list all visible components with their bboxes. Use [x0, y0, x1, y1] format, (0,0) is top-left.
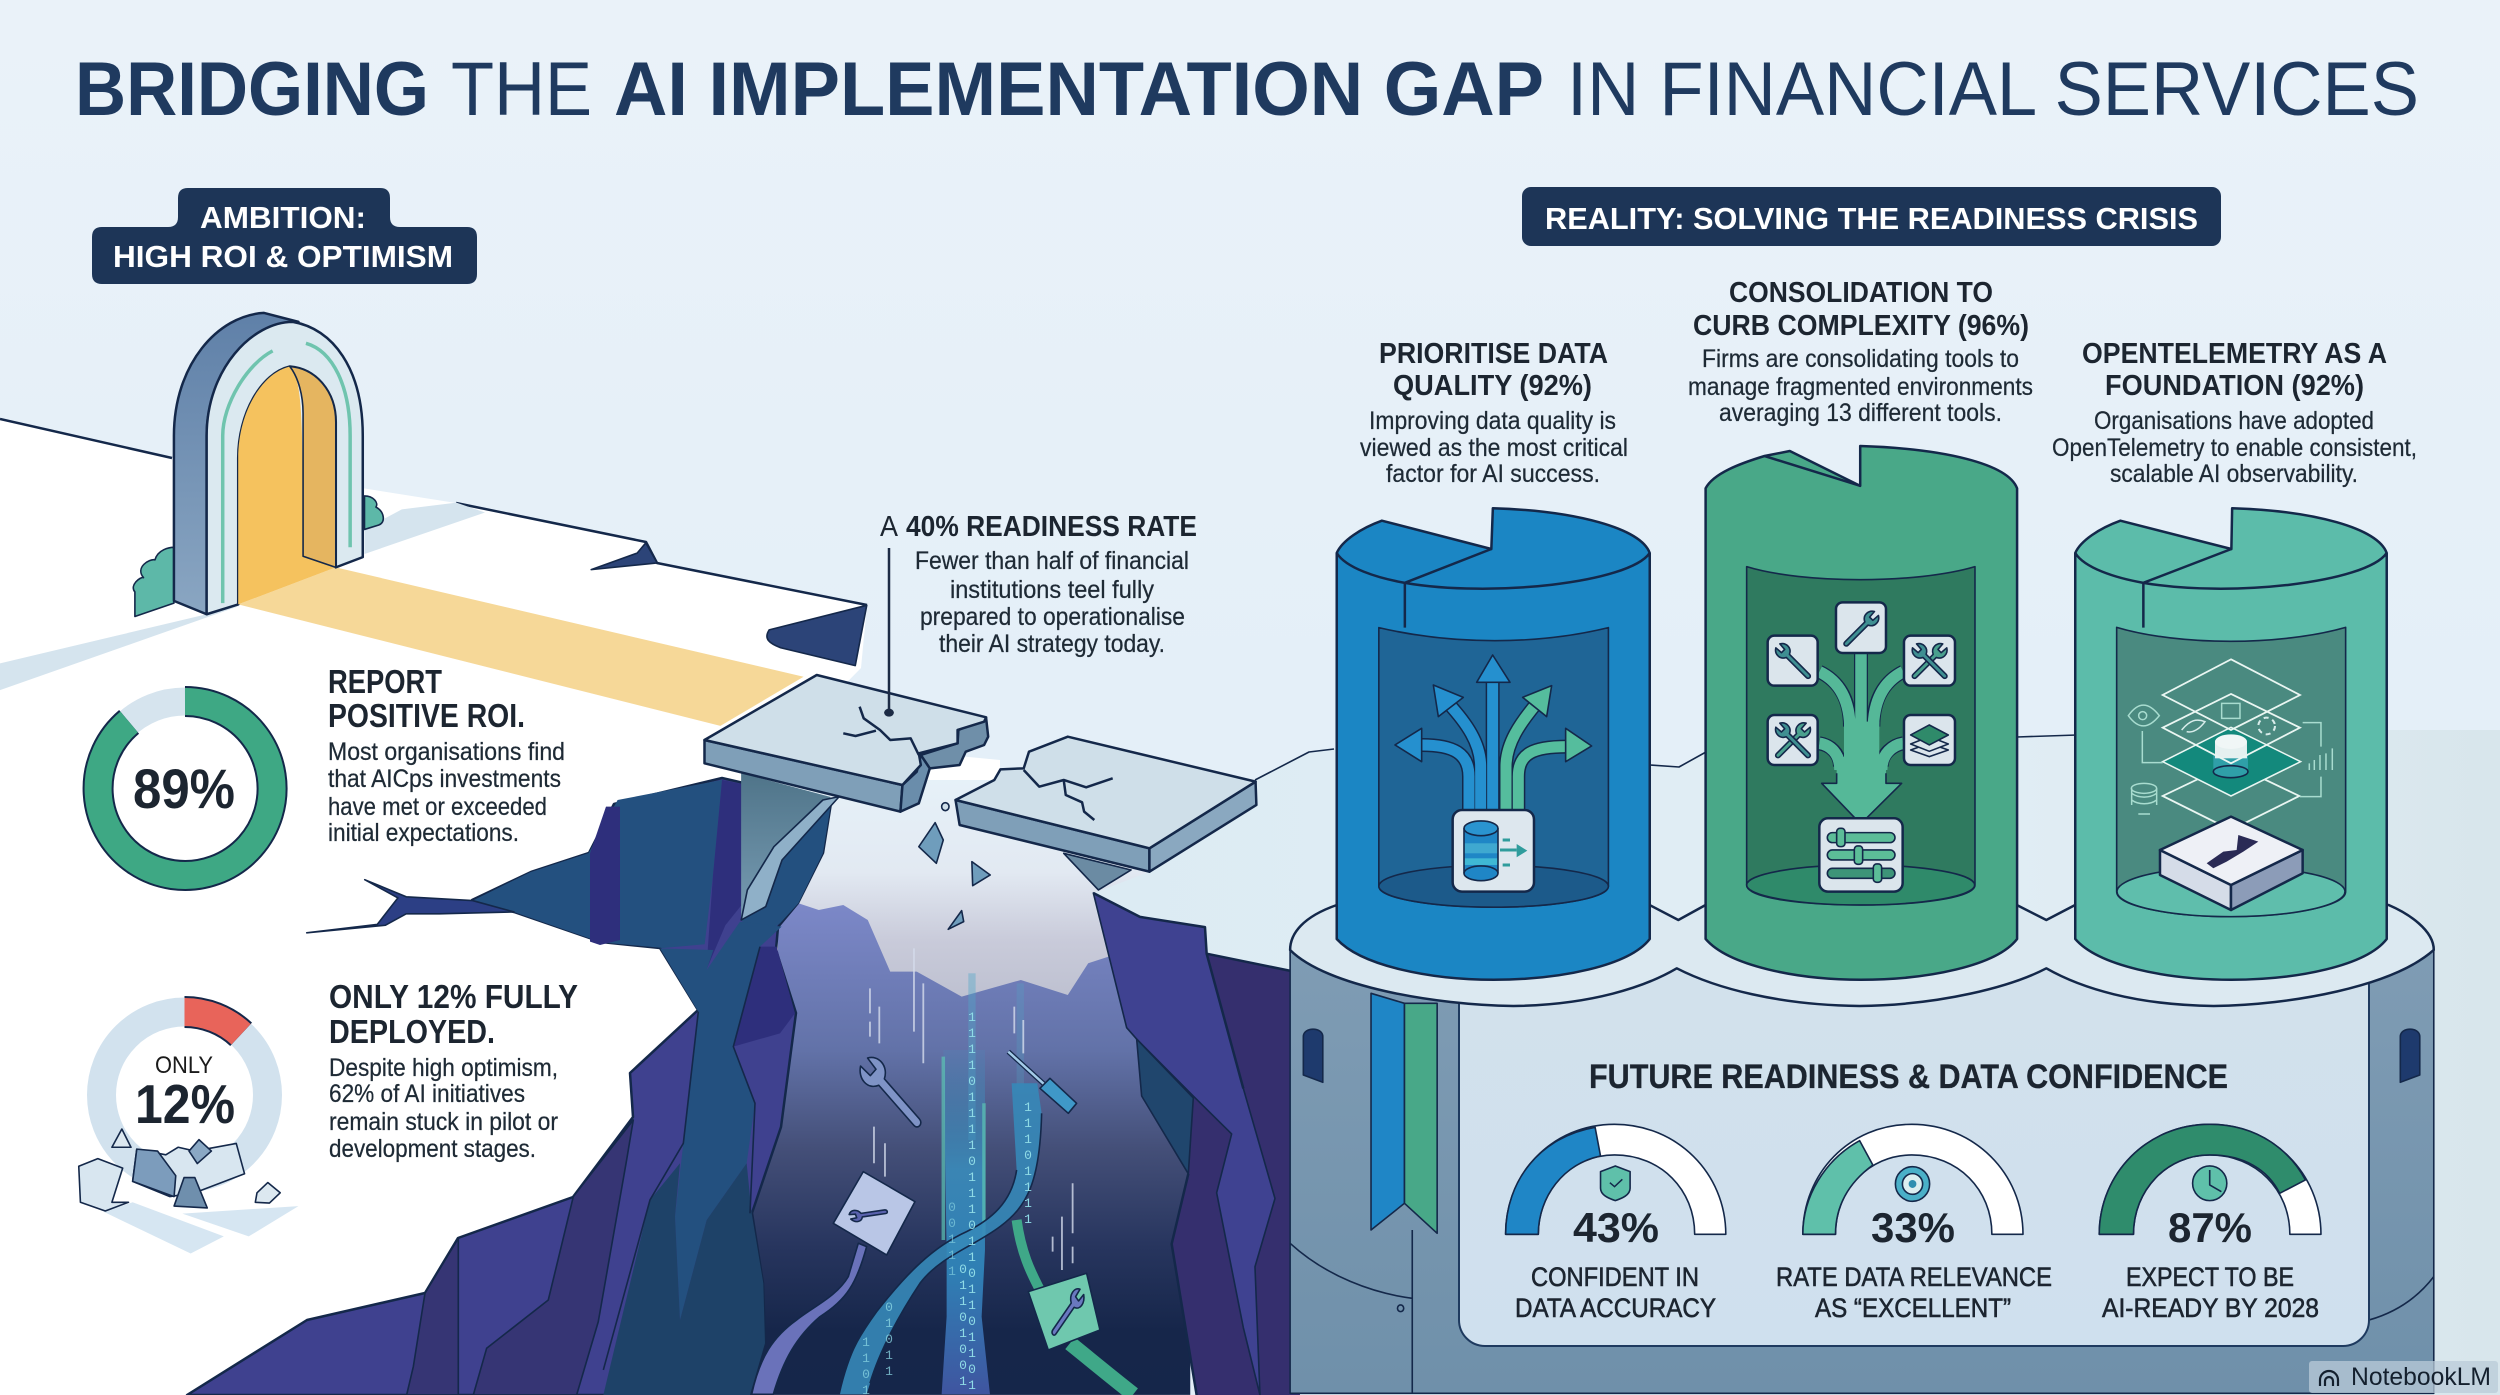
- pedestal top plate: [1290, 905, 2434, 1006]
- data stream: [752, 948, 1133, 1394]
- gauge: 33%: AS “EXCELLENT”: [1815, 1293, 2011, 1323]
- cylinder rim: [1337, 549, 1650, 628]
- illustration: gateway arch and light beam: [0, 313, 867, 726]
- icon: sliders card: [1819, 818, 1903, 892]
- navy base: [603, 1163, 765, 1395]
- gauge: 43%: 43%: [1573, 1204, 1659, 1251]
- faint stem: [968, 973, 976, 1140]
- gauge: 43%: DATA ACCURACY: [1515, 1293, 1716, 1323]
- icon: base block: [2160, 817, 2303, 910]
- upper blue face: [307, 773, 831, 970]
- ground crack: [307, 880, 514, 933]
- far-left stripe: [590, 807, 620, 945]
- falling lines: [870, 948, 1073, 1270]
- right slab top: [956, 737, 1256, 848]
- donut: 12%: [102, 1012, 268, 1178]
- text: only 12% deployed: ONLY 12% FULLY: [329, 978, 578, 1015]
- callout: 40% readiness: 40% READINESS RATE: [906, 511, 1197, 543]
- text: report positive roi: REPORT: [328, 663, 442, 700]
- donut value: [98, 701, 272, 875]
- badge: ambition: HIGH ROI & OPTIMISM: [113, 239, 453, 274]
- title: IN FINANCIAL SERVICES: [1567, 47, 2419, 132]
- title: AI IMPLEMENTATION GAP: [614, 47, 1544, 132]
- text: consolidation: Firms are consolidating tools to: [1702, 345, 2019, 373]
- green ribbon: [1017, 1220, 1040, 1290]
- window floor: [2117, 867, 2345, 917]
- diverging arrows: [1395, 655, 1592, 892]
- gauge: 43%: [1515, 1204, 1716, 1323]
- rubble pieces: [79, 1159, 128, 1211]
- blue column: [660, 922, 782, 1320]
- fragments: [919, 823, 943, 863]
- stream glow edges: [943, 1057, 984, 1240]
- icon: tool tile upper right: [1904, 636, 1955, 686]
- right slab side: [1149, 782, 1256, 872]
- callout: 40% readiness: Fewer than half of financial: [915, 547, 1189, 575]
- badge: ambition: [92, 188, 477, 284]
- callout dot: [884, 709, 894, 717]
- binary digits: 01011: [882, 1300, 896, 1380]
- text: only 12% deployed: remain stuck in pilot or: [329, 1108, 558, 1136]
- text: only 12% deployed: 62% of AI initiatives: [329, 1080, 525, 1108]
- gauges: [1506, 1124, 2321, 1234]
- donut label: 89%: [133, 757, 235, 820]
- pedestal body: [1290, 947, 2434, 1393]
- text: opentelemetry: [2052, 338, 2417, 488]
- callout: 40% readiness: institutions teel fully: [950, 576, 1154, 604]
- dark teal recess: [1137, 1039, 1193, 1174]
- cylinder: data quality: [1337, 508, 1650, 980]
- arch front: [207, 322, 363, 614]
- text: report positive roi: [328, 663, 565, 847]
- text: opentelemetry: OPENTELEMETRY AS A: [2082, 338, 2387, 370]
- callout: 40% readiness: [880, 511, 1197, 658]
- cylinder: opentelemetry: [2075, 508, 2387, 980]
- callout: 40% readiness: their AI strategy today.: [939, 630, 1165, 658]
- text: prioritise data quality: [1360, 338, 1628, 488]
- cylinder body: [2075, 508, 2387, 980]
- dark stripe: [706, 780, 746, 970]
- binary digits: 00111: [944, 1200, 960, 1280]
- icon: notebook arcs: [2320, 1371, 2338, 1386]
- icon: shield: [1601, 1166, 1630, 1201]
- leader line: [888, 548, 890, 713]
- text: prioritise data quality: PRIORITISE DATA: [1379, 338, 1608, 370]
- left slab cracks: [843, 707, 919, 755]
- rock detail beside sliver: [741, 797, 839, 940]
- far-left dark faces: [407, 1120, 633, 1395]
- support under right slab: [1064, 853, 1131, 890]
- gauge: 43%: CONFIDENT IN: [1531, 1262, 1699, 1292]
- title: THE: [451, 47, 592, 132]
- cylinder rim: [1765, 456, 1860, 486]
- lower faces: [590, 807, 795, 1395]
- icon: database card: [1453, 810, 1534, 892]
- window: [1379, 628, 1608, 907]
- text: opentelemetry: scalable AI observability.: [2110, 460, 2358, 488]
- text: consolidation: CONSOLIDATION TO: [1729, 277, 1993, 309]
- text: opentelemetry: FOUNDATION (92%): [2105, 370, 2364, 402]
- left slab front: [704, 740, 902, 812]
- donut track: [102, 1012, 268, 1178]
- text: only 12% deployed: development stages.: [329, 1135, 536, 1163]
- shadow under slab: [741, 773, 831, 920]
- title: BRIDGING: [75, 47, 429, 132]
- arch opening: [238, 367, 336, 604]
- lit face: [1093, 893, 1275, 1395]
- text: report positive roi: Most organisations find: [328, 738, 565, 766]
- gauge: 87%: 87%: [2168, 1204, 2252, 1251]
- gauge tracks: [1506, 1124, 1726, 1234]
- icon: tool tile top: [1836, 602, 1886, 653]
- text: consolidation: [1688, 277, 2033, 427]
- icon: screwdriver: [1008, 1052, 1077, 1113]
- right cliff: [1093, 893, 1300, 1395]
- ground band: [0, 503, 485, 690]
- text: report positive roi: POSITIVE ROI.: [328, 697, 525, 734]
- side icons: [2128, 703, 2332, 814]
- left cliff: [187, 773, 839, 1395]
- blue ribbon: [840, 1083, 1042, 1394]
- icon: core cylinder: [2213, 734, 2248, 778]
- text: prioritise data quality: factor for AI success.: [1386, 460, 1600, 488]
- text: opentelemetry: Organisations have adopted: [2094, 407, 2374, 435]
- donut: 12%: 12%: [135, 1073, 235, 1135]
- light sliver: [741, 797, 839, 920]
- text: report positive roi: have met or exceeded: [328, 793, 547, 821]
- title: [75, 47, 2419, 132]
- arrow heads: [1477, 655, 1510, 682]
- cliff outline: [1093, 893, 1290, 1395]
- gauge: 87%: AI-READY BY 2028: [2102, 1293, 2319, 1323]
- cylinder: consolidation: [1706, 446, 2017, 980]
- icon: green wrench tile: [1028, 1273, 1100, 1350]
- slot right: [2400, 1029, 2420, 1082]
- donut track: [98, 702, 272, 876]
- watermark: notebooklm: [2309, 1361, 2498, 1393]
- text: prioritise data quality: QUALITY (92%): [1393, 370, 1592, 402]
- gauge: 33%: [1776, 1204, 2052, 1323]
- donut labels: ONLY: [155, 1052, 213, 1079]
- stacked layers: [2163, 763, 2299, 830]
- text: only 12% deployed: [329, 978, 578, 1163]
- watermark: notebooklm: NotebookLM: [2351, 1363, 2491, 1391]
- chasm mountains and depth: [745, 903, 1190, 1395]
- cliff mass: [187, 778, 831, 1395]
- gauge: 87%: EXPECT TO BE: [2126, 1262, 2294, 1292]
- icon: light wrench tile: [833, 1172, 915, 1255]
- text: consolidation: averaging 13 different tools.: [1719, 399, 2002, 427]
- badge: reality: [1522, 187, 2221, 246]
- cylinder rim: [2075, 549, 2387, 628]
- arrow trunk: [1822, 722, 1902, 824]
- bushes: [133, 496, 383, 616]
- text: consolidation: CURB COMPLEXITY (96%): [1693, 310, 2029, 342]
- donut: 89%: [98, 701, 272, 876]
- text: report positive roi: initial expectations.: [328, 819, 519, 847]
- stream column: [942, 1050, 990, 1394]
- slot left: [1303, 1029, 1323, 1082]
- right slab cracks: [1024, 770, 1113, 820]
- left slab break: [900, 755, 930, 812]
- gauge fills: [1506, 1127, 1601, 1234]
- converging arrows: [1819, 653, 1903, 767]
- gauge: 33%: RATE DATA RELEVANCE: [1776, 1262, 2052, 1292]
- text: opentelemetry: OpenTelemetry to enable consistent,: [2052, 434, 2417, 462]
- left slab top: [704, 675, 986, 785]
- icon: tool tile upper left: [1768, 636, 1818, 686]
- donut value: [184, 1012, 241, 1034]
- window: [2117, 627, 2346, 917]
- rivet: [1397, 1305, 1404, 1312]
- panel: future readiness: [1459, 960, 2369, 1346]
- callout: 40% readiness: prepared to operationalise: [920, 603, 1185, 631]
- badge: reality: REALITY: SOLVING THE READINESS CRISIS: [1545, 201, 2198, 236]
- gauge: 87%: [2102, 1204, 2319, 1323]
- dark base: [1093, 893, 1300, 1395]
- pedestal seams: [1290, 1230, 2434, 1393]
- window: [1747, 567, 1975, 905]
- binary digits: 11101111: [1020, 1100, 1036, 1228]
- panel heading: FUTURE READINESS & DATA CONFIDENCE: [1589, 1058, 2228, 1096]
- right slab front: [956, 800, 1149, 872]
- callout: 40% readiness: A: [880, 511, 899, 543]
- broken slabs and fragments: [704, 675, 1256, 929]
- gauge: 33%: 33%: [1871, 1204, 1955, 1251]
- icon: layers tile: [1904, 715, 1955, 765]
- icon: clock: [2193, 1166, 2227, 1201]
- icon: tool tile lower left: [1768, 715, 1818, 765]
- dark purple recess: [733, 947, 795, 1047]
- text: only 12% deployed: Despite high optimism,: [329, 1054, 558, 1082]
- rubble shadow: [104, 1202, 298, 1254]
- text: prioritise data quality: Improving data quality is: [1369, 407, 1616, 435]
- badge: ambition: AMBITION:: [200, 200, 366, 235]
- cylinder body: [1706, 446, 2017, 980]
- text: only 12% deployed: DEPLOYED.: [329, 1013, 495, 1050]
- window floor: [1747, 865, 1975, 905]
- arch inlay: [223, 343, 350, 603]
- rubble: [79, 1129, 298, 1254]
- panel background: [1459, 960, 2369, 1346]
- icon: wrench: [860, 1057, 921, 1127]
- binary digits: [858, 1010, 1036, 1395]
- window floor: [1379, 865, 1608, 907]
- icon: target: [1895, 1167, 1930, 1201]
- text: consolidation: manage fragmented environments: [1688, 373, 2033, 401]
- facet lines: [603, 947, 760, 1370]
- arch side: [174, 313, 298, 614]
- binary digits: 01101001: [956, 1262, 970, 1390]
- right ground: [1094, 730, 2500, 1395]
- chasm sky: [745, 780, 1170, 1395]
- purple ribbon: [752, 1243, 867, 1394]
- cliff notches: [591, 543, 867, 666]
- left plateau: [0, 419, 1000, 1395]
- cylinder body: [1337, 508, 1650, 980]
- text: report positive roi: that AICps investments: [328, 765, 561, 793]
- light beam: [238, 567, 804, 726]
- banner: [1371, 993, 1404, 1230]
- text: prioritise data quality: viewed as the most critical: [1360, 434, 1628, 462]
